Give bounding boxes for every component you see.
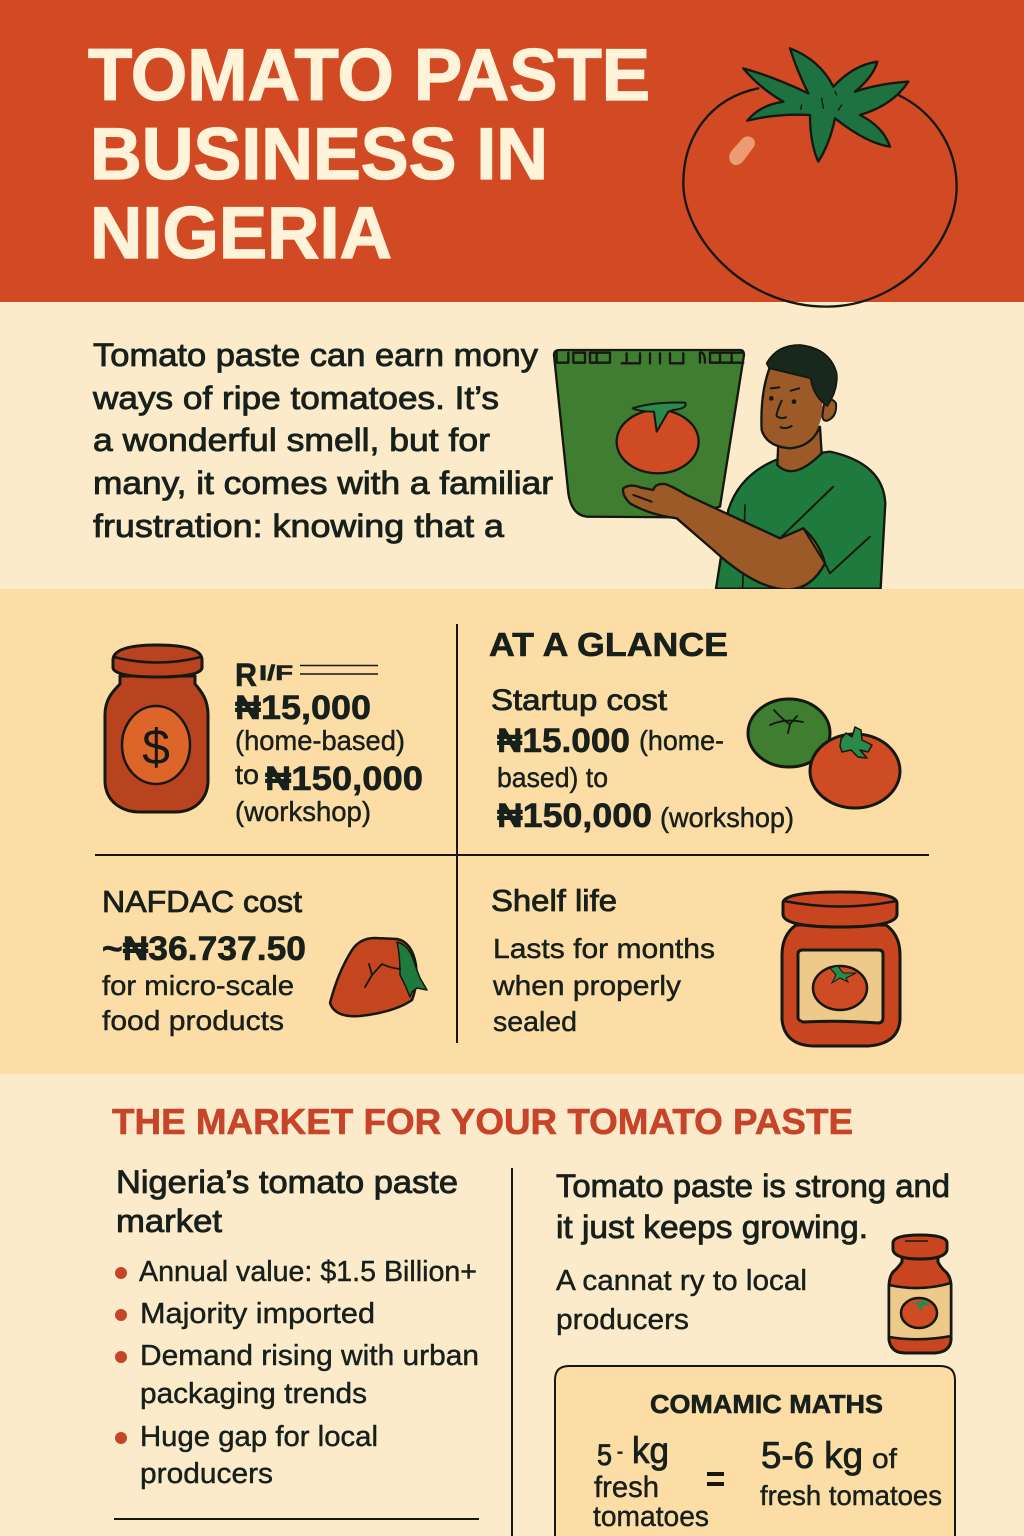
- heading: at a glance: AT A GLANCE: [489, 626, 728, 663]
- title: TOMATO PASTE: [88, 35, 650, 116]
- list: market facts: packaging trends: [140, 1378, 367, 1410]
- text block: growth statement: Tomato paste is strong and: [556, 1168, 950, 1204]
- icon: equals sign: [707, 1474, 724, 1484]
- text block: cost range: to: [235, 759, 259, 790]
- text block: intro paragraph: [92, 337, 553, 544]
- text block: NAFDAC cost: for micro-scale: [102, 970, 294, 1001]
- text block: shelf life: [491, 883, 715, 1037]
- icon: money jar: [105, 645, 208, 812]
- text block: fresh input: [593, 1430, 709, 1533]
- column: market growth: [555, 1168, 955, 1536]
- text block: paste output: [760, 1435, 942, 1511]
- text block: startup cost: Startup cost: [491, 684, 668, 717]
- subheading: Nigeria's market: [116, 1164, 458, 1239]
- subheading: Nigeria's market: market: [116, 1203, 222, 1239]
- title: NIGERIA: [90, 193, 392, 274]
- list: market facts: [115, 1256, 479, 1490]
- icon: small paste bottle: [889, 1235, 951, 1353]
- text block: cost range: ₦150,000: [265, 760, 423, 798]
- text block: growth statement: [556, 1168, 950, 1336]
- title: BUSINESS IN: [90, 114, 548, 195]
- text block: paste output: 5-6 kg: [761, 1435, 863, 1476]
- text block: cost range: (home-based): [235, 725, 405, 756]
- text block: startup cost: (home-: [639, 725, 724, 756]
- text block: cost range: R: [235, 657, 257, 693]
- text block: paste output: fresh tomatoes: [760, 1480, 942, 1511]
- panel: introduction: [92, 337, 885, 589]
- panel: header banner: [0, 0, 1024, 307]
- text block: intro paragraph: Tomato paste can earn mony: [93, 337, 538, 373]
- text block: shelf life: Shelf life: [491, 883, 617, 918]
- list: market facts: Annual value: $1.5 Billion+: [139, 1256, 477, 1288]
- panel: the market: [112, 1101, 955, 1536]
- text block: intro paragraph: many, it comes with a familiar: [93, 465, 553, 501]
- icon: man holding tomato paste bag: [554, 345, 885, 589]
- text block: fresh input: tomatoes: [593, 1501, 709, 1533]
- text block: NAFDAC cost: ~₦36.737.50: [102, 930, 306, 968]
- heading: the market: THE MARKET FOR YOUR TOMATO PASTE: [112, 1101, 853, 1142]
- icon: green bag: [554, 350, 744, 517]
- text block: shelf life: sealed: [493, 1006, 577, 1037]
- text block: shelf life: Lasts for months: [493, 933, 715, 964]
- text block: cost range: I/F: [259, 662, 293, 685]
- text block: paste output: of: [872, 1443, 897, 1474]
- text block: cost range: [235, 657, 423, 827]
- text block: cost range: (workshop): [235, 796, 371, 827]
- text block: NAFDAC cost: NAFDAC cost: [102, 884, 302, 919]
- text block: fresh input: -: [617, 1441, 623, 1463]
- text block: startup cost: [491, 684, 794, 835]
- text block: startup cost: ₦150,000: [497, 797, 652, 835]
- text block: startup cost: ₦15.000: [497, 722, 630, 760]
- icon: money jar: $: [142, 719, 170, 775]
- text block: growth statement: producers: [556, 1304, 689, 1336]
- text block: shelf life: when properly: [492, 970, 681, 1001]
- list: market facts: Majority imported: [140, 1298, 375, 1330]
- text block: NAFDAC cost: food products: [102, 1005, 284, 1036]
- icon: green and red tomatoes: [748, 699, 900, 808]
- title: [88, 35, 650, 274]
- text block: startup cost: based) to: [497, 762, 608, 793]
- man neck and face: [777, 427, 822, 471]
- text block: intro paragraph: ways of ripe tomatoes. It’s: [92, 380, 499, 416]
- man hair: [767, 345, 837, 406]
- list: market facts: Demand rising with urban: [140, 1340, 479, 1372]
- text block: intro paragraph: a wonderful smell, but for: [93, 422, 490, 458]
- column: Nigeria's market: [114, 1164, 479, 1519]
- list: market facts: producers: [140, 1458, 273, 1490]
- text block: fresh input: kg: [632, 1430, 669, 1471]
- cell: cost range: [105, 645, 423, 827]
- panel: maths box: [555, 1366, 955, 1536]
- man arm and hand: [623, 484, 825, 589]
- icon: large tomato: [683, 48, 957, 307]
- heading: maths box: COMAMIC MATHS: [650, 1389, 883, 1419]
- subheading: Nigeria's market: Nigeria’s tomato paste: [116, 1164, 458, 1200]
- text block: NAFDAC cost: [102, 884, 306, 1036]
- panel: at a glance: [0, 589, 1024, 1074]
- icon: side-view tomato: [330, 938, 427, 1016]
- cell: NAFDAC cost: [102, 884, 427, 1036]
- text block: cost range: ₦15,000: [235, 689, 371, 727]
- text block: growth statement: it just keeps growing.: [556, 1209, 868, 1245]
- cell: shelf life: [491, 883, 900, 1046]
- text block: intro paragraph: frustration: knowing that a: [93, 508, 504, 544]
- text block: startup cost: (workshop): [660, 802, 794, 833]
- list: market facts: Huge gap for local: [140, 1421, 378, 1453]
- icon: labelled jar: [782, 892, 900, 1046]
- text block: fresh input: 5: [597, 1439, 612, 1472]
- text block: fresh input: fresh: [594, 1471, 659, 1504]
- text block: growth statement: A cannat ry to local: [556, 1265, 807, 1297]
- man shirt: [716, 452, 885, 589]
- cell: startup cost: [489, 626, 900, 835]
